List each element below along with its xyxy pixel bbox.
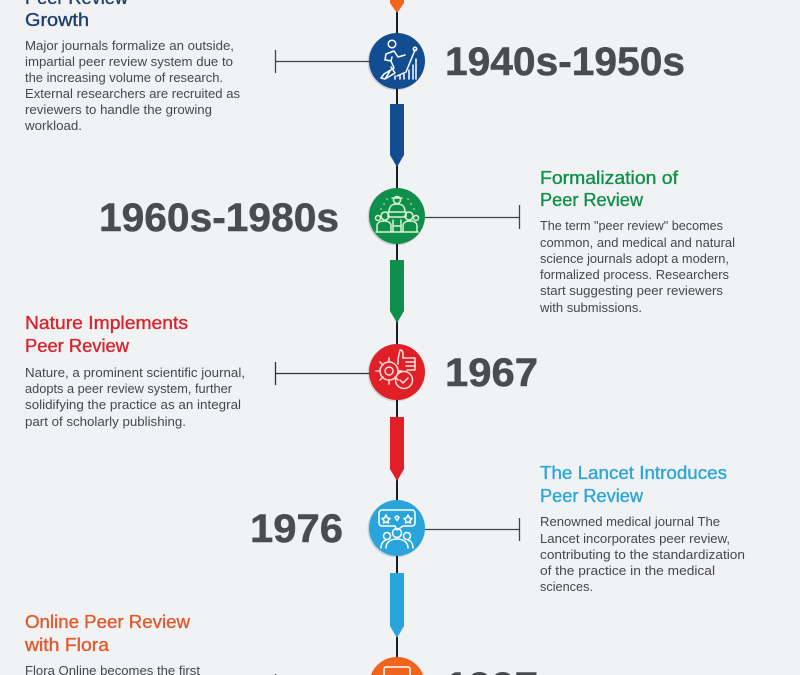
connector: blue bbox=[390, 104, 404, 167]
panel: 1940s-1950s bbox=[24, 0, 685, 133]
text block: formalization description: common, and medical and natural bbox=[540, 235, 735, 250]
icon: online browser bbox=[371, 657, 423, 675]
heading: Formalization of Peer Review: Peer Review bbox=[540, 190, 644, 210]
heading: Nature Implements Peer Review bbox=[25, 313, 188, 356]
text block: formalization description: The term "peer review" becomes bbox=[540, 218, 723, 233]
heading: The Lancet Introduces Peer Review bbox=[540, 463, 727, 506]
text block: formalization description: start suggesting peer reviewers bbox=[540, 283, 723, 298]
bracket line bbox=[425, 518, 520, 541]
year: 1940s-1950s: 1940s-1950s bbox=[445, 40, 685, 84]
bracket line bbox=[275, 50, 370, 73]
year: 1967: 1967 bbox=[445, 351, 538, 395]
text block: growth description: workload. bbox=[24, 118, 82, 133]
connector: orange bbox=[390, 0, 404, 13]
year: 1976: 1976 bbox=[250, 507, 343, 551]
heading: Online Peer Review with Flora bbox=[24, 612, 191, 655]
heading: The Lancet Introduces Peer Review: Peer Review bbox=[540, 486, 644, 506]
icon: reviews speech bubble and people bbox=[368, 500, 425, 558]
heading: The Lancet Introduces Peer Review: The Lancet Introduces bbox=[540, 463, 727, 483]
panel: 1967 bbox=[25, 313, 538, 429]
icon detail: browser window bbox=[384, 667, 410, 675]
icon: person climbing growth chart bbox=[368, 33, 425, 90]
text block: formalization description: with submissions. bbox=[539, 300, 642, 315]
heading: Online Peer Review with Flora: Online Peer Review bbox=[25, 612, 191, 632]
heading: Peer Review Growth bbox=[25, 0, 129, 30]
text block: Lancet description: Renowned medical journal The bbox=[540, 514, 720, 529]
bracket line bbox=[425, 205, 520, 229]
panel: 1976 bbox=[250, 463, 745, 594]
heading: Formalization of Peer Review bbox=[540, 168, 679, 210]
text block: Lancet description: sciences. bbox=[540, 579, 593, 594]
icon: group meeting bbox=[368, 188, 425, 246]
text block: Nature description: solidifying the practice as an integral bbox=[25, 397, 241, 412]
text block: growth description: impartial peer review system due to bbox=[25, 54, 233, 69]
heading: Nature Implements Peer Review: Nature Implements bbox=[25, 313, 188, 333]
text block: formalization description bbox=[539, 218, 735, 315]
connector: light blue bbox=[390, 573, 404, 638]
text block: Nature description: part of scholarly publishing. bbox=[25, 414, 186, 429]
year: 1960s-1980s: 1960s-1980s bbox=[99, 196, 339, 240]
text block: formalization description: formalized process. Researchers bbox=[540, 267, 729, 282]
text block: growth description bbox=[24, 38, 240, 133]
heading: Nature Implements Peer Review: Peer Review bbox=[25, 336, 130, 356]
icon: gear thumbs up check bbox=[368, 344, 425, 402]
timeline spine bbox=[396, 0, 398, 675]
bracket line bbox=[275, 362, 370, 385]
text block: Lancet description: contributing to the standardization bbox=[540, 547, 745, 562]
panel: 1960s-1980s bbox=[99, 168, 735, 315]
text block: Nature description bbox=[25, 365, 245, 429]
connector: red bbox=[390, 417, 404, 481]
bracket line bbox=[274, 674, 276, 675]
text block: Lancet description bbox=[540, 514, 745, 594]
text block: Nature description: Nature, a prominent scientific journal, bbox=[25, 365, 245, 380]
connector: green bbox=[390, 260, 404, 323]
text block: Nature description: adopts a peer review system, further bbox=[25, 381, 233, 396]
text block: growth description: External researchers are recruited as bbox=[25, 86, 240, 101]
heading: Peer Review Growth: Growth bbox=[25, 10, 89, 30]
heading: Formalization of Peer Review: Formalization of bbox=[540, 168, 679, 188]
text block: growth description: Major journals formalize an outside, bbox=[25, 38, 234, 53]
heading: Online Peer Review with Flora: with Flora bbox=[24, 635, 110, 655]
text block: growth description: the increasing volume of research. bbox=[25, 70, 223, 85]
text block: Lancet description: of the practice in the medical bbox=[540, 563, 715, 578]
text block: growth description: reviewers to handle the growing bbox=[25, 102, 212, 117]
text block: Lancet description: Lancet incorporates peer review, bbox=[540, 531, 730, 546]
text block: formalization description: science journals adopt a modern, bbox=[540, 251, 729, 266]
panel: Online Peer Review with Flora bbox=[24, 612, 538, 675]
